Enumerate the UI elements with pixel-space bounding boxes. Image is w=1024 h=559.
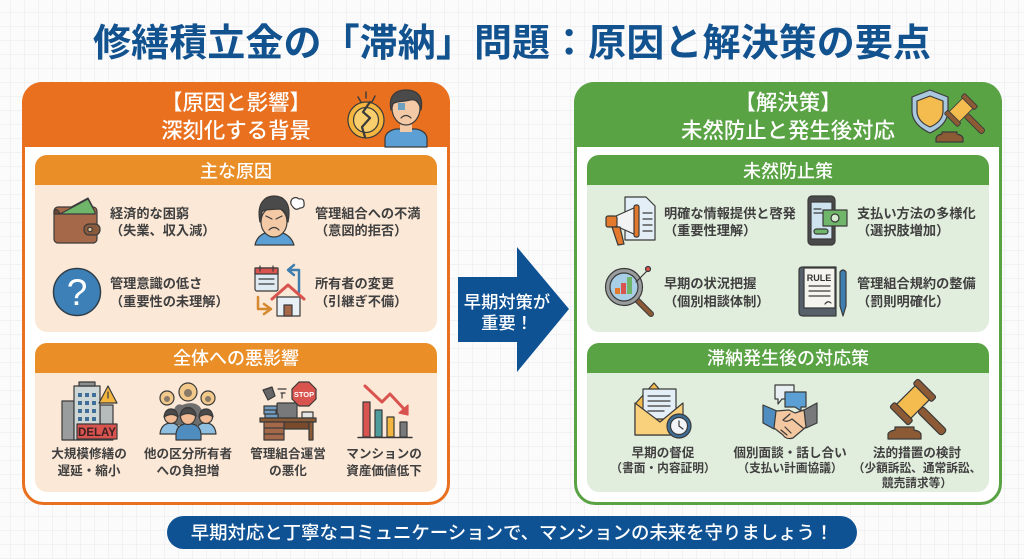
text: association management: 管理組合運営 (250, 446, 326, 461)
text: clear information (664, 205, 796, 238)
text: payment methods: 支払い方法の多様化 (857, 205, 976, 221)
section heading: main causes: 主な原因 (200, 162, 272, 182)
icon: falling bar chart (358, 386, 412, 438)
icon: calendar, house and arrows (255, 265, 304, 316)
text: legal measures (853, 445, 981, 490)
icon: question mark: ? (67, 272, 87, 313)
icon: rule book and pen (799, 267, 846, 316)
text: early status check: （個別相談体制） (664, 294, 770, 309)
text: clear information: 明確な情報提供と啓発 (664, 205, 796, 221)
panel: causes and impacts (22, 82, 450, 504)
text: early demand: 早期の督促 (632, 445, 695, 460)
text: low awareness: （重要性の未理解） (110, 293, 229, 309)
icon: worried person (385, 90, 427, 147)
icon: question mark (54, 268, 100, 316)
footer banner (167, 516, 857, 549)
panel subheading: causes: 深刻化する背景 (161, 119, 311, 143)
text: individual discussion: 個別面談・話し合い (733, 445, 847, 460)
text: repair delay: 遅延・縮小 (58, 463, 121, 478)
section heading: preventive measures: 未然防止策 (743, 160, 833, 182)
icon: magnifier with chart (606, 266, 651, 314)
section: after delinquency measures (587, 343, 989, 492)
text: repair delay (51, 446, 127, 478)
text: early status check: 早期の状況把握 (664, 275, 756, 291)
section: main causes (35, 155, 437, 332)
text: early demand: （書面・内容証明） (610, 461, 716, 475)
text: individual discussion (733, 445, 847, 475)
text: payment methods (857, 205, 976, 238)
text: clear information: （重要性理解） (664, 222, 756, 238)
panel heading: solutions: 【解決策】 (735, 91, 841, 115)
icon: angry man (255, 196, 304, 245)
icon: gavel (888, 379, 958, 447)
text: early status check (664, 275, 770, 309)
text: dissatisfaction with association: （意図的拒否） (315, 222, 407, 238)
section: preventive measures (587, 155, 989, 332)
section heading: negative effects: 全体への悪影響 (173, 348, 299, 368)
text: low awareness (110, 275, 229, 309)
text: change of owner: （引継ぎ不備） (315, 293, 407, 309)
title: 修繕積立金の「滞納」問題：原因と解決策の要点 (93, 23, 931, 65)
text: asset value decline (346, 447, 422, 478)
text: low awareness: 管理意識の低さ (110, 275, 202, 291)
text: burden on owners: 他の区分所有者 (144, 446, 232, 461)
arrow: early action important (458, 247, 569, 372)
icon: shield and gavel (912, 90, 994, 143)
text: bylaws: 管理組合規約の整備 (857, 275, 976, 291)
text: legal measures: （少額訴訟、通常訴訟、 (853, 461, 981, 475)
text: repair delay: 大規模修繕の (51, 446, 127, 461)
text: dissatisfaction with association (315, 205, 420, 238)
text: asset value decline: マンションの (346, 447, 422, 461)
text: burden on owners: への負担増 (157, 463, 219, 478)
section heading: after delinquency: 滞納発生後の対応策 (707, 348, 869, 368)
text: burden on owners (144, 446, 232, 478)
text: dissatisfaction with association: 管理組合への不満 (315, 205, 420, 221)
icon: broken coin (348, 92, 384, 138)
text: change of owner (315, 275, 407, 309)
text: economic hardship: 経済的な困窮 (110, 205, 189, 221)
text: asset value decline: 資産価値低下 (346, 463, 422, 478)
icon: envelope and clock (635, 383, 691, 438)
icon: desk with stop sign: STOP (294, 390, 314, 399)
text: economic hardship: （失業、収入減） (110, 222, 216, 238)
text: bylaws (857, 275, 976, 309)
footer banner: 早期対応と丁寧なコミュニケーションで、マンションの未来を守りましょう！ (191, 522, 833, 543)
text: change of owner: 所有者の変更 (315, 275, 394, 291)
icon: delayed building: DELAY (78, 427, 116, 439)
icon: rule book and pen: RULE (807, 273, 831, 283)
text: association management: の悪化 (269, 464, 307, 478)
icon: burdened owners (160, 383, 216, 440)
icon: wallet (54, 198, 100, 243)
text: legal measures: 法的措置の検討 (873, 445, 961, 460)
text: individual discussion: （支払い計画協議） (737, 461, 843, 475)
panel heading: causes: 【原因と影響】 (161, 91, 311, 115)
section: overall negative effects (35, 343, 437, 492)
arrow: early action important: 重要！ (481, 313, 533, 333)
panel subheading: solutions: 未然防止と発生後対応 (681, 119, 895, 143)
text: payment methods: （選択肢増加） (857, 222, 949, 238)
text: economic hardship (110, 205, 216, 238)
text: bylaws: （罰則明確化） (857, 294, 949, 309)
panel: solutions (574, 82, 1002, 504)
icon: phone and cash (808, 196, 847, 245)
text: association management (250, 446, 326, 478)
icon: handshake and speech bubbles (763, 385, 817, 439)
text: early demand (610, 445, 716, 475)
icon: delayed building (62, 382, 117, 440)
icon: desk with stop sign (260, 382, 316, 440)
text: legal measures: 競売請求等） (882, 476, 952, 490)
icon: megaphone and document (606, 197, 655, 245)
arrow: early action important: 早期対策が (464, 292, 550, 312)
